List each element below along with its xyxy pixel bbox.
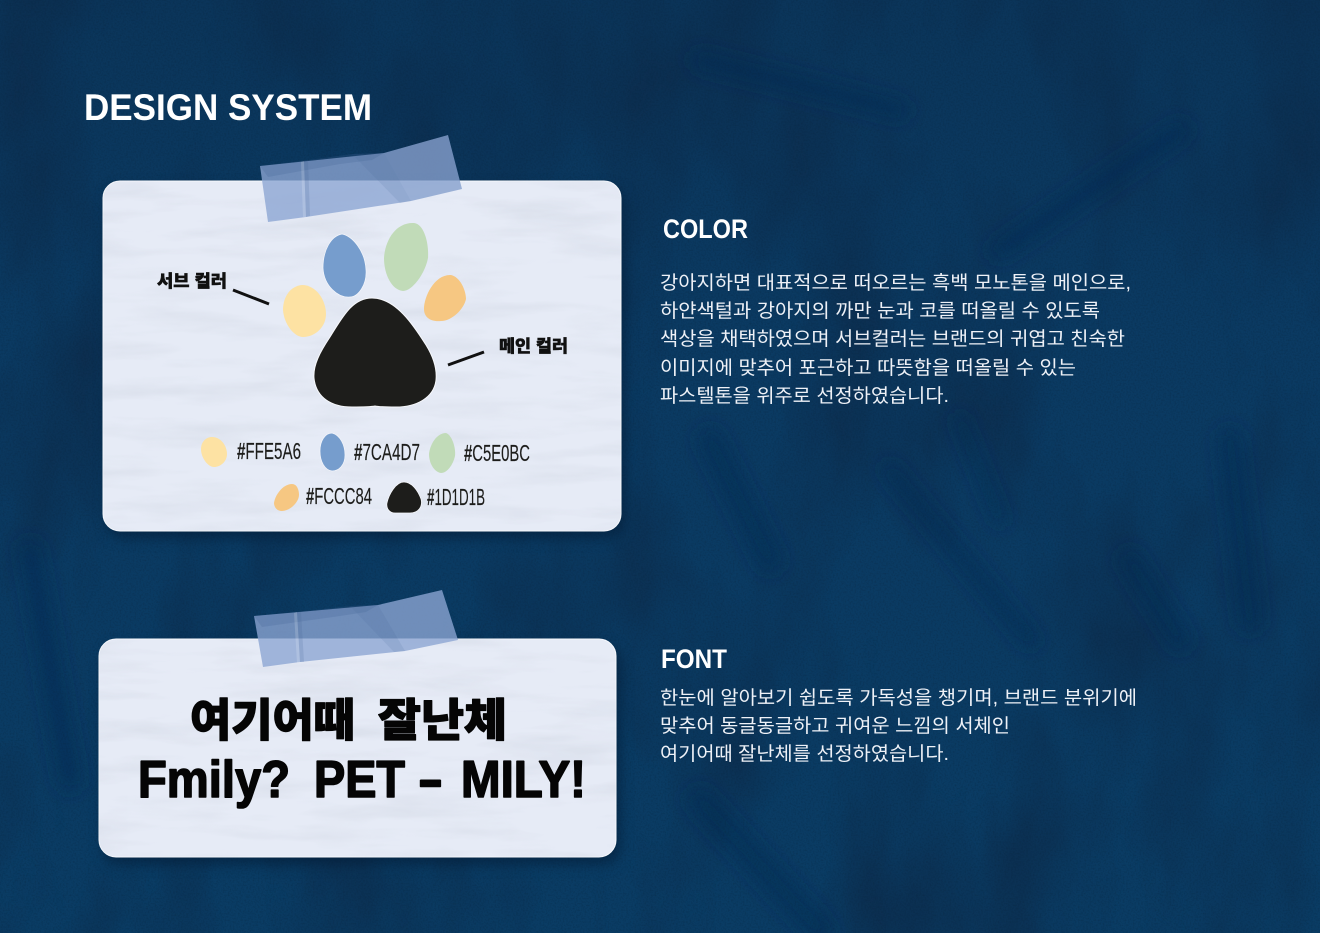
title: DESIGN SYSTEM <box>84 87 372 128</box>
panel: font card <box>99 590 616 857</box>
tape: color card <box>260 135 462 222</box>
toe: blue <box>323 234 366 297</box>
label: sub color <box>157 267 269 304</box>
swatch: FFE5A6 <box>201 437 301 467</box>
toe: orange <box>424 275 466 321</box>
text block: font description <box>660 687 1137 765</box>
font sample: Latin slogan: PET <box>314 751 405 809</box>
swatch: C5E0BC <box>429 433 530 473</box>
text block: color description: 파스텔톤을 위주로 선정하였습니다. <box>660 385 949 407</box>
swatch: FFE5A6: #FFE5A6 <box>237 438 301 464</box>
main pad: black <box>314 298 436 407</box>
text block: color description: 강아지하면 대표적으로 떠오르는 흑백 모노톤을 메인으로, <box>660 272 1131 294</box>
font sample: Latin slogan <box>138 751 586 809</box>
font sample: Latin slogan: Fmily? <box>138 751 290 809</box>
font sample: Korean name: 잘난체 <box>378 684 507 749</box>
heading: font: FONT <box>661 644 727 674</box>
label: main color: 메인 컬러 <box>499 332 568 357</box>
paw print diagram <box>283 223 466 407</box>
text block: color description: 색상을 채택하였으며 서브컬러는 브랜드의 귀엽고 친숙한 <box>660 328 1125 350</box>
text block: font description: 여기어때 잘난체를 선정하였습니다. <box>660 743 949 765</box>
swatch: 7CA4D7 <box>320 433 420 471</box>
heading: color: COLOR <box>663 214 748 244</box>
swatch: FCCC84 <box>274 483 372 511</box>
swatch: 7CA4D7: #7CA4D7 <box>354 439 420 465</box>
swatch: FCCC84: #FCCC84 <box>306 483 372 509</box>
text block: font description: 맞추어 동글동글하고 귀여운 느낌의 서체인 <box>660 715 1010 737</box>
text block: color description <box>660 272 1131 407</box>
font sample: Latin slogan: MILY! <box>461 751 586 809</box>
font sample: Latin slogan: - <box>418 751 443 809</box>
font sample: Korean name: 여기어때 <box>190 684 355 749</box>
font sample: Korean name <box>190 684 507 749</box>
text block: color description: 하얀색털과 강아지의 까만 눈과 코를 떠올릴 수 있도록 <box>660 300 1100 322</box>
toe: yellow <box>283 285 326 337</box>
swatch: C5E0BC: #C5E0BC <box>464 440 530 466</box>
swatch: 1D1D1B <box>387 482 485 513</box>
text block: font description: 한눈에 알아보기 쉽도록 가독성을 챙기며, 브랜드 분위기에 <box>660 687 1137 709</box>
label: main color <box>448 332 568 365</box>
swatch: 1D1D1B: #1D1D1B <box>427 484 485 510</box>
text block: color description: 이미지에 맞추어 포근하고 따뜻함을 떠올릴 수 있는 <box>660 357 1076 379</box>
toe: green <box>384 223 428 291</box>
panel: color card <box>103 135 621 531</box>
label: sub color: 서브 컬러 <box>157 267 227 292</box>
tape: font card <box>254 590 458 667</box>
